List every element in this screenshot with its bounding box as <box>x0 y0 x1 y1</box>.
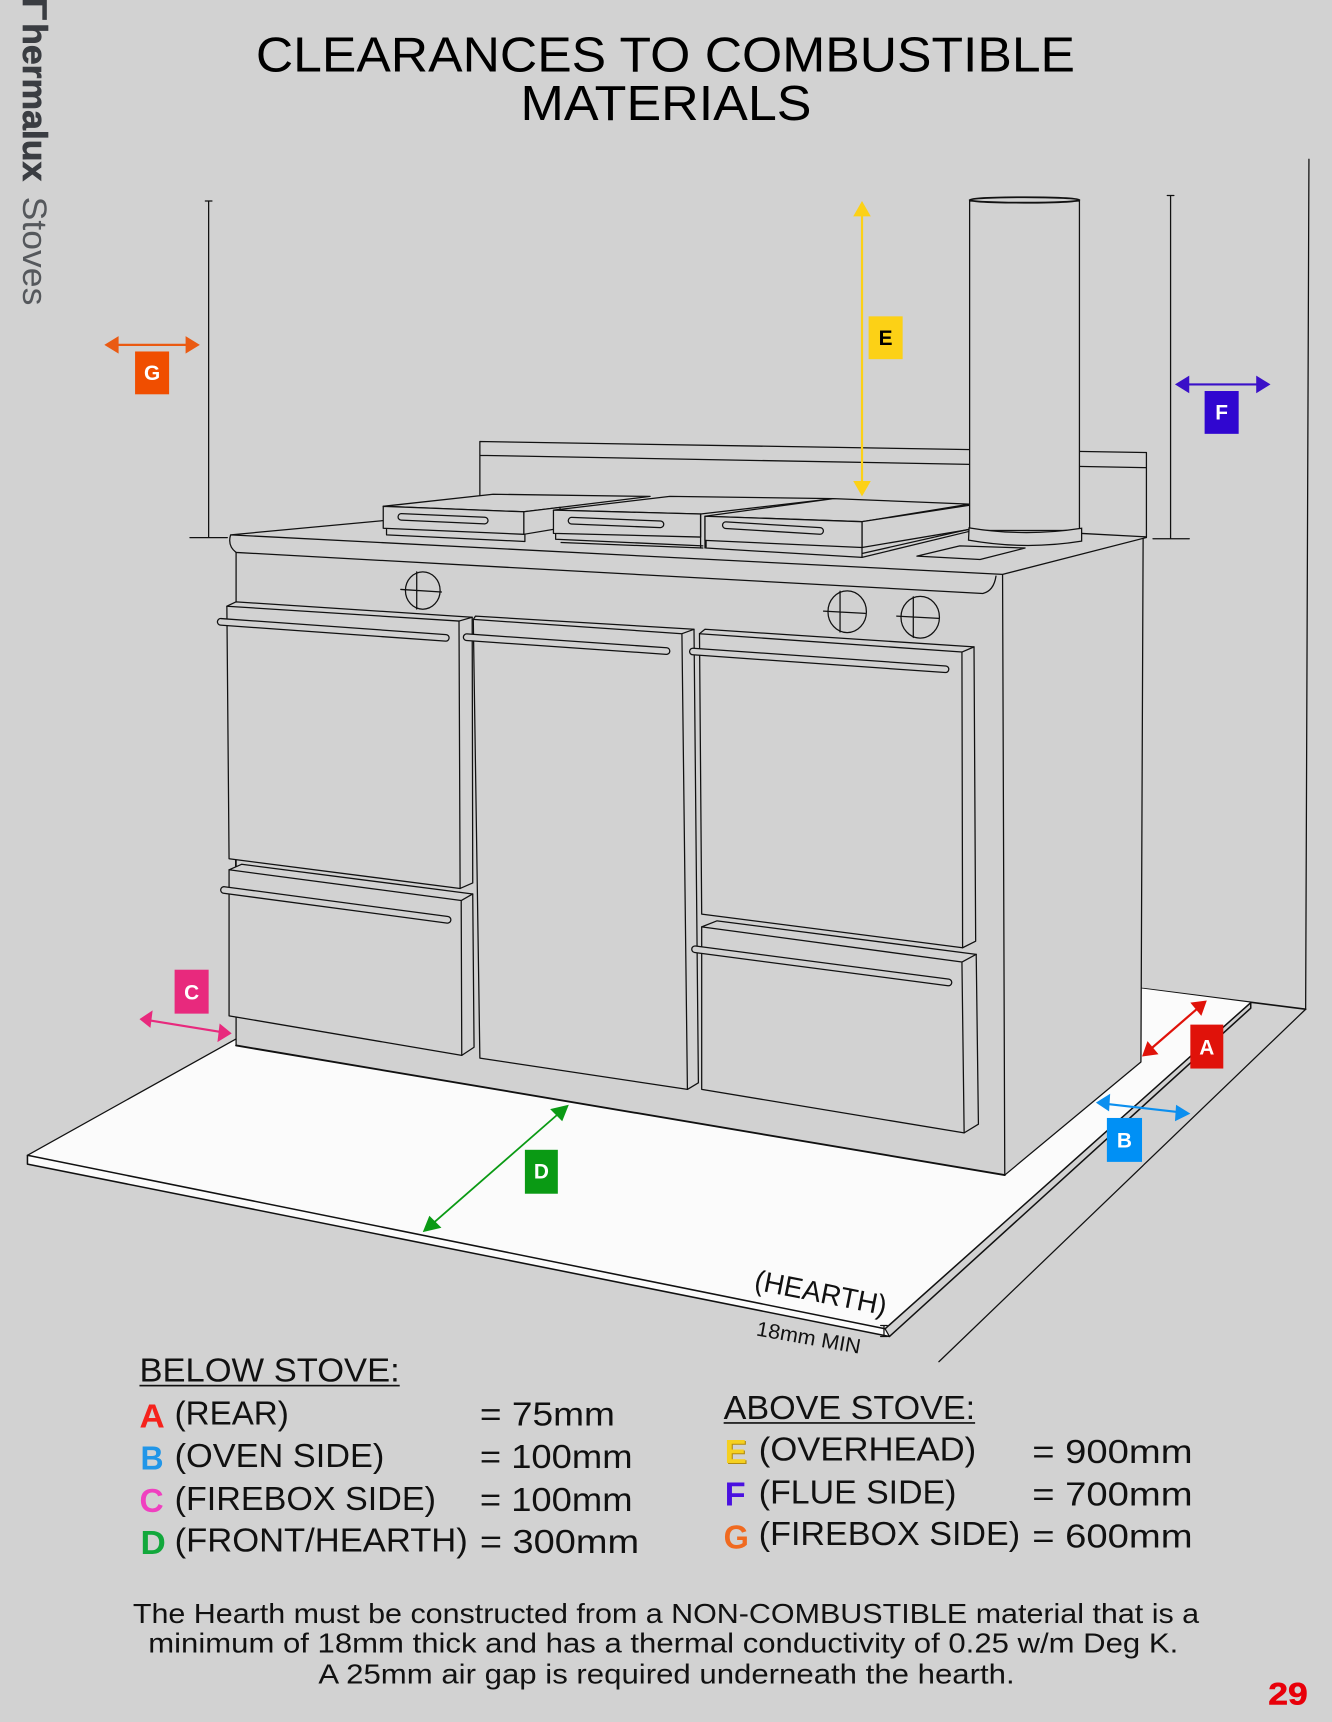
row F: = 700mm <box>1032 1476 1193 1513</box>
hearth thickness label: 18mm MIN <box>755 1318 862 1359</box>
row F: (FLUE SIDE) <box>759 1473 956 1510</box>
arrow B <box>1096 1094 1190 1162</box>
knobs <box>401 572 939 638</box>
arrow E: E <box>879 327 893 350</box>
flue pipe <box>969 197 1082 545</box>
row G: G <box>724 1518 749 1555</box>
row C: (FIREBOX SIDE) <box>175 1480 436 1517</box>
row A: = 75mm <box>480 1395 615 1432</box>
hearth note: A 25mm air gap is required underneath the hearth. <box>318 1658 1015 1689</box>
countertop <box>230 495 1146 594</box>
arrow B: B <box>1117 1130 1132 1153</box>
sidebar brand text <box>15 0 53 305</box>
row C: = 100mm <box>480 1481 633 1518</box>
title <box>256 27 1075 131</box>
door: right lower <box>691 921 978 1133</box>
row G <box>724 1515 1193 1555</box>
row E <box>725 1431 1193 1471</box>
row E: = 900mm <box>1032 1433 1193 1470</box>
hearth note: minimum of 18mm thick and has a thermal conductivity of 0.25 w/m Deg K. <box>148 1628 1178 1659</box>
row B <box>141 1437 633 1476</box>
arrow A: A <box>1199 1036 1214 1059</box>
title: MATERIALS <box>521 76 811 131</box>
row E: E <box>725 1433 747 1470</box>
row G: = 600mm <box>1032 1517 1193 1554</box>
left lid <box>383 494 650 541</box>
dimension line: firebox side height <box>190 201 227 538</box>
room wall and floor lines <box>939 159 1309 1362</box>
row D <box>141 1522 639 1561</box>
below stove legend <box>139 1352 639 1561</box>
arrow A <box>1142 1000 1223 1069</box>
stove body <box>236 538 1143 1175</box>
stove <box>217 197 1146 1175</box>
row F: F <box>725 1476 746 1513</box>
row A: A <box>139 1398 165 1435</box>
row C <box>139 1480 633 1519</box>
row A: (REAR) <box>175 1394 289 1431</box>
arrow D <box>423 1105 569 1232</box>
title: CLEARANCES TO COMBUSTIBLE <box>256 27 1075 82</box>
arrow F: F <box>1215 402 1228 425</box>
heading: below stove: BELOW STOVE: <box>139 1352 400 1389</box>
row E: (OVERHEAD) <box>759 1431 976 1468</box>
arrow F <box>1175 376 1271 434</box>
row B: (OVEN SIDE) <box>175 1437 384 1474</box>
row E: E <box>726 1434 748 1471</box>
hearth note: The Hearth must be constructed from a NON-COMBUSTIBLE material that is a <box>133 1598 1200 1629</box>
row B: = 100mm <box>480 1438 633 1475</box>
arrow C <box>139 970 232 1042</box>
dimension line: flue side height <box>1153 196 1189 539</box>
row A <box>139 1394 615 1435</box>
page number: 29 <box>1268 1675 1308 1711</box>
sidebar brand text: hermalux <box>15 23 53 181</box>
door: left lower <box>220 860 474 1055</box>
arrow E <box>853 201 903 496</box>
row F <box>725 1473 1193 1513</box>
hearth label: (HEARTH) <box>752 1265 890 1322</box>
door: left upper <box>217 602 473 888</box>
row B: B <box>141 1439 164 1476</box>
heading: above stove: ABOVE STOVE: <box>724 1389 975 1426</box>
row G: (FIREBOX SIDE) <box>759 1515 1020 1552</box>
row D: (FRONT/HEARTH) <box>175 1522 468 1559</box>
door: center <box>463 616 698 1089</box>
arrow G <box>104 336 200 394</box>
door: right upper <box>689 629 976 948</box>
arrow G: G <box>144 362 160 385</box>
right lid <box>705 499 970 557</box>
arrow D: D <box>534 1160 549 1183</box>
hearth note <box>133 1598 1200 1689</box>
middle lid <box>553 496 833 548</box>
flue plate on top <box>917 546 1025 559</box>
hearth <box>27 988 1251 1336</box>
row C: C <box>139 1482 164 1519</box>
above stove legend <box>724 1389 1193 1555</box>
arrow C: C <box>184 981 199 1004</box>
sidebar brand text: Stoves <box>15 197 53 305</box>
backsplash <box>480 442 1146 537</box>
row D: = 300mm <box>480 1523 639 1560</box>
hot plate lids <box>383 494 970 557</box>
row D: D <box>141 1524 166 1561</box>
